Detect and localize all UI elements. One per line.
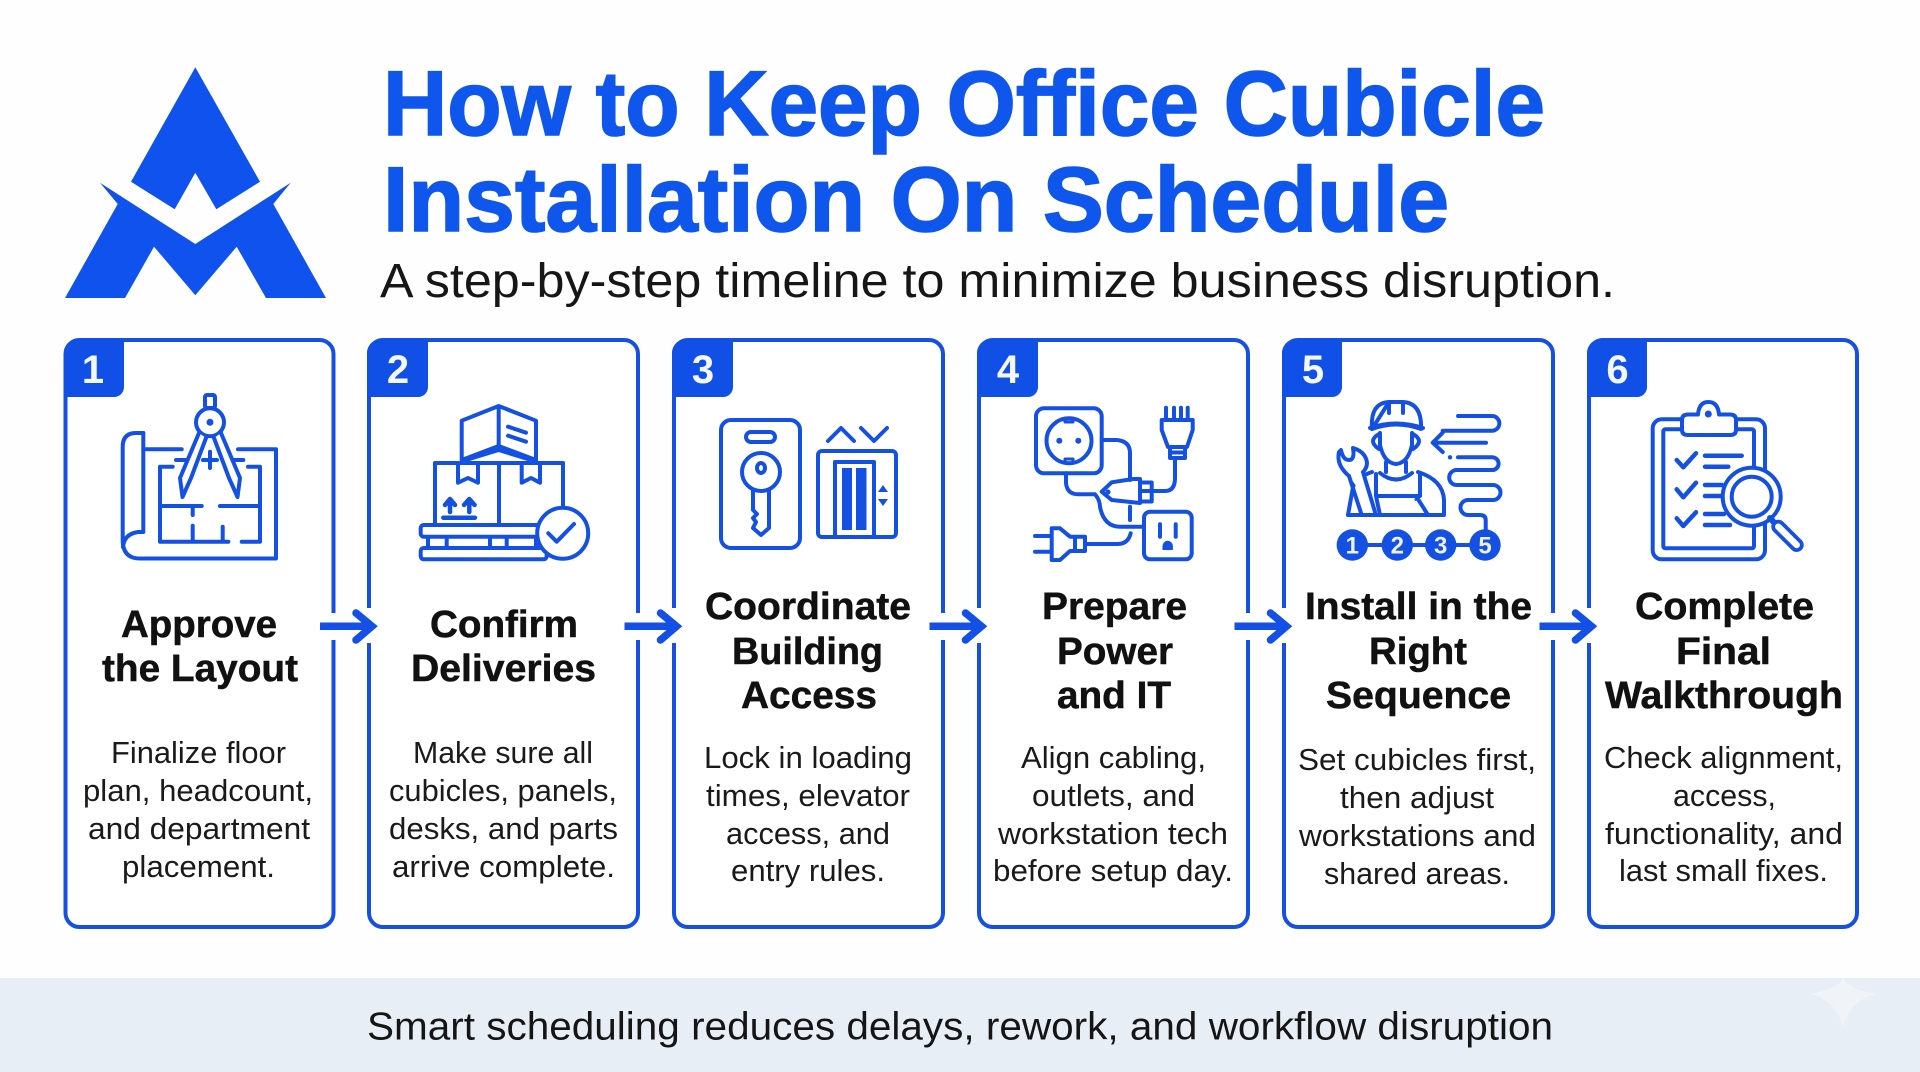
title: Installation On Schedule [383, 149, 1449, 251]
panel: step 5 [1282, 339, 1553, 927]
step description: arrive complete. [392, 849, 615, 884]
step description: last small fixes. [1619, 853, 1828, 888]
step title: Approve [121, 604, 277, 646]
step title: Coordinate [705, 586, 911, 628]
step description: before setup day. [993, 853, 1233, 888]
step description: plan, headcount, [83, 773, 313, 808]
step title [102, 604, 298, 690]
arrow 4 to 5 [1234, 608, 1288, 643]
step description: times, elevator [706, 778, 910, 813]
step description: outlets, and [1032, 778, 1195, 813]
step description: entry rules. [731, 853, 885, 888]
step title: Deliveries [411, 648, 596, 690]
step description: Finalize floor [111, 735, 286, 770]
step description: Check alignment, [1604, 740, 1843, 775]
icon: key card and elevator [721, 420, 896, 548]
title: How to Keep Office Cubicle [383, 53, 1545, 155]
footer band [0, 978, 1920, 1072]
step description [993, 740, 1233, 888]
footer text: Smart scheduling reduces delays, rework, and workflow disruption [367, 1006, 1553, 1048]
step title: Access [741, 675, 877, 717]
step number 2: 2 [387, 348, 409, 392]
step number 5: 5 [1302, 348, 1324, 392]
icon: blueprint and compass [123, 395, 276, 558]
step description [704, 740, 912, 888]
step description: cubicles, panels, [389, 773, 617, 808]
step title [1605, 586, 1843, 717]
step description [83, 735, 313, 884]
arrow 5 to 6 [1540, 608, 1592, 643]
step description: desks, and parts [389, 811, 618, 846]
step description: access, and [726, 816, 890, 851]
step number 1: 1 [82, 348, 104, 392]
panel: step 6 [1587, 339, 1857, 927]
step title: Final [1676, 631, 1771, 673]
step description: Align cabling, [1021, 740, 1206, 775]
step description [389, 735, 618, 884]
panel: step 4 [977, 339, 1248, 927]
step description: functionality, and [1605, 816, 1843, 851]
icon: power outlets and plugs [1035, 408, 1193, 560]
step title [705, 586, 911, 717]
step description: and department [88, 811, 310, 846]
sequence numbers: 1 [1346, 532, 1359, 560]
step title: Right [1369, 631, 1467, 673]
step title [411, 604, 596, 690]
step title [1042, 586, 1187, 717]
step title: Complete [1635, 586, 1814, 628]
logo [65, 67, 326, 298]
step description: Make sure all [413, 735, 593, 770]
step description: then adjust [1340, 780, 1494, 815]
panel: step 2 [367, 339, 638, 927]
panel: step 1 [64, 339, 334, 927]
panel: step 3 [672, 339, 943, 927]
step title: Prepare [1042, 586, 1187, 628]
step description [1298, 742, 1536, 891]
title [383, 53, 1545, 251]
sequence numbers [1346, 532, 1492, 560]
step title: Sequence [1326, 675, 1511, 717]
step description: access, [1673, 778, 1776, 813]
subtitle: A step-by-step timeline to minimize business disruption. [380, 255, 1615, 308]
step number 3: 3 [692, 348, 714, 392]
step description: workstation tech [997, 816, 1228, 851]
step description [1604, 740, 1843, 888]
step description: placement. [122, 849, 275, 884]
step title: Confirm [430, 604, 578, 646]
sequence numbers: 3 [1434, 532, 1447, 560]
step title: Power [1057, 631, 1173, 673]
step description: workstations and [1298, 818, 1536, 853]
sequence numbers: 2 [1391, 532, 1404, 560]
step description: Set cubicles first, [1298, 742, 1536, 777]
arrow 1 to 2 [320, 608, 373, 643]
step title: the Layout [102, 648, 298, 690]
icon: worker with sequence path [1337, 402, 1501, 561]
step title: Install in the [1305, 586, 1532, 628]
step title: Building [732, 631, 883, 673]
icon: boxes on pallet [421, 406, 588, 559]
step number 6: 6 [1606, 348, 1629, 392]
icon: clipboard checklist with magnifier [1653, 402, 1797, 559]
step title: and IT [1057, 675, 1171, 717]
step number 4: 4 [997, 348, 1020, 392]
step description: Lock in loading [704, 740, 912, 775]
step description: shared areas. [1324, 856, 1510, 891]
sequence numbers: 5 [1478, 532, 1492, 560]
step title: Walkthrough [1605, 675, 1843, 717]
decorative star watermark [1810, 978, 1876, 1027]
arrow 2 to 3 [624, 608, 678, 643]
arrow 3 to 4 [930, 608, 982, 643]
step title [1305, 586, 1532, 717]
